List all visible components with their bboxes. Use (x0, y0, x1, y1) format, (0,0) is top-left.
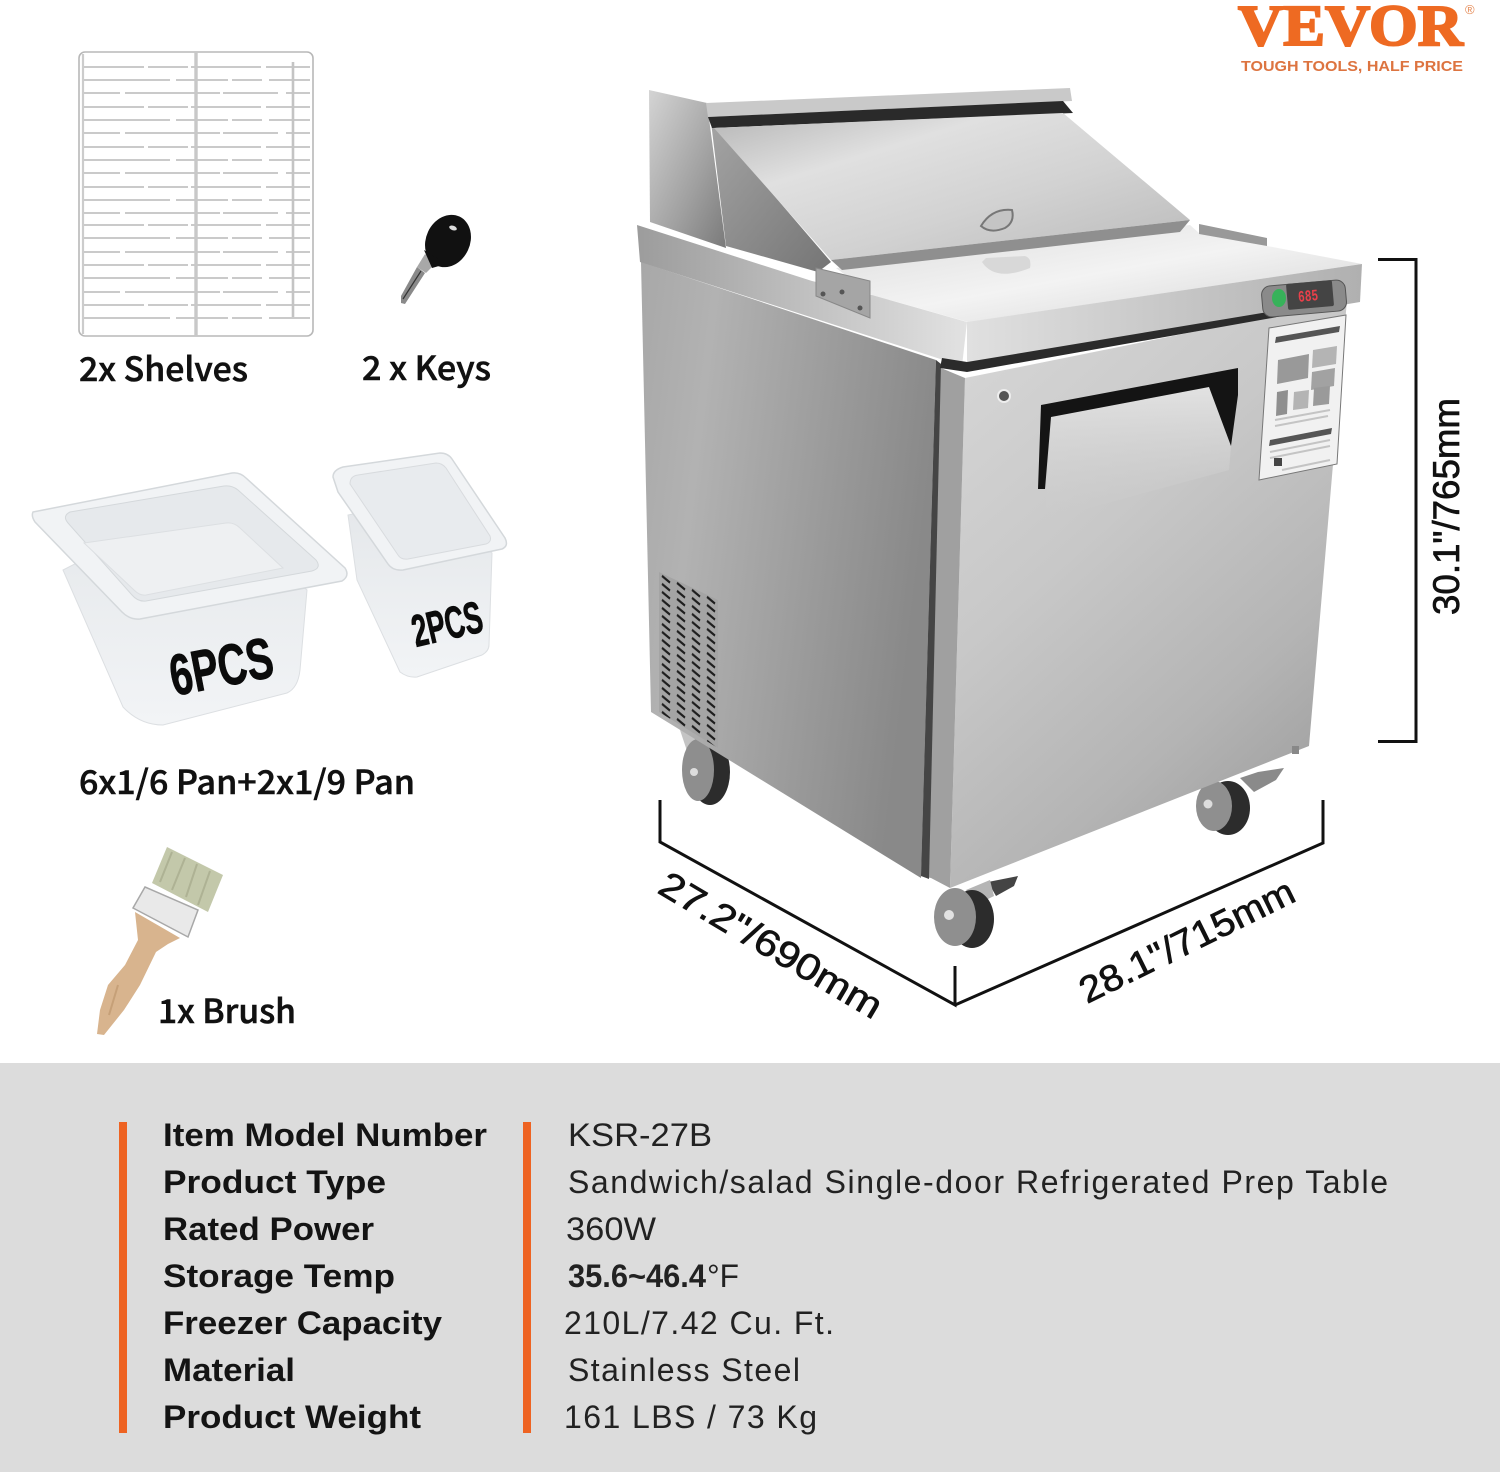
front rail (967, 264, 1362, 368)
spec values: 360W (566, 1211, 657, 1247)
sliding lid (714, 113, 1190, 260)
spec values: Sandwich/salad Single-door Refrigerated Prep Table (568, 1164, 1388, 1200)
gasket shadow (940, 303, 1345, 372)
logo: VEVOR: ® (1465, 2, 1475, 17)
label: 1x Brush: 1x Brush (158, 985, 296, 1033)
panel: accessories (32, 52, 506, 1035)
dimension: depth: 27.2"/690mm (652, 864, 890, 1027)
caster: front right (1196, 768, 1284, 835)
hood top strip (706, 88, 1072, 117)
temperature digits: 685 (1297, 287, 1319, 307)
handle reflection (982, 256, 1030, 274)
label: 2 x Keys: 2 x Keys (362, 342, 491, 390)
instruction label (1259, 315, 1346, 480)
spec values: °F (707, 1258, 739, 1294)
icon: wire shelf (79, 52, 313, 336)
spec labels: Product Type (163, 1164, 386, 1200)
lid front lip (831, 220, 1190, 270)
icon: large 1/6 pan (32, 473, 347, 725)
spec labels (163, 1117, 487, 1435)
lid handle (981, 210, 1013, 231)
spec values: Stainless Steel (568, 1352, 800, 1388)
dimension: height: 30.1"/765mm (1426, 398, 1467, 615)
back rail tab (1199, 224, 1267, 246)
temperature controller (1261, 279, 1347, 318)
cabinet corner strip (921, 360, 965, 888)
accent bar: left (119, 1122, 127, 1433)
label: 2PCS: 2PCS (407, 591, 487, 657)
icon: small 1/9 pan (333, 453, 506, 677)
logo: VEVOR (1238, 0, 1475, 75)
hood side panel (649, 90, 726, 248)
spec labels: Rated Power (163, 1211, 374, 1247)
door lock (998, 390, 1010, 402)
spec labels: Item Model Number (163, 1117, 487, 1153)
hood dark slot (708, 101, 1073, 128)
label: pans: 6x1/6 Pan+2x1/9 Pan (79, 756, 415, 804)
refrigerated prep table (637, 88, 1362, 948)
spec values: 161 LBS / 73 Kg (564, 1399, 817, 1435)
counter top surface (836, 225, 1362, 322)
spec labels: Product Weight (163, 1399, 421, 1435)
panel: specifications (0, 1063, 1500, 1472)
icon: key (401, 207, 479, 304)
dimension: depth (652, 800, 955, 1027)
accent bar: middle (523, 1122, 531, 1433)
caster: front center (934, 876, 1018, 948)
logo: VEVOR: TOUGH TOOLS, HALF PRICE (1241, 58, 1463, 75)
cabinet side panel (641, 262, 936, 878)
label: 2x Shelves: 2x Shelves (79, 343, 248, 391)
spec labels: Freezer Capacity (163, 1305, 442, 1341)
caster: back left (680, 730, 730, 805)
dimension: height (1378, 260, 1467, 742)
corner bracket (816, 268, 870, 318)
icon: brush (97, 847, 223, 1035)
label: 6PCS: 6PCS (164, 625, 279, 709)
spec values: KSR-27B (568, 1117, 712, 1153)
spec values: 35.6~46.4 (568, 1258, 706, 1294)
hood wedge (711, 122, 831, 272)
spec values: 210L/7.42 Cu. Ft. (564, 1305, 834, 1341)
dimension: width: 28.1"/715mm (1072, 871, 1301, 1011)
adjustable foot (1292, 746, 1299, 754)
left rail (637, 225, 967, 366)
spec values (564, 1117, 1388, 1435)
door (950, 300, 1347, 888)
spec labels: Material (163, 1352, 295, 1388)
dimension: width (955, 800, 1323, 1011)
door handle (1038, 368, 1238, 520)
spec labels: Storage Temp (163, 1258, 395, 1294)
compressor vents (659, 572, 718, 748)
